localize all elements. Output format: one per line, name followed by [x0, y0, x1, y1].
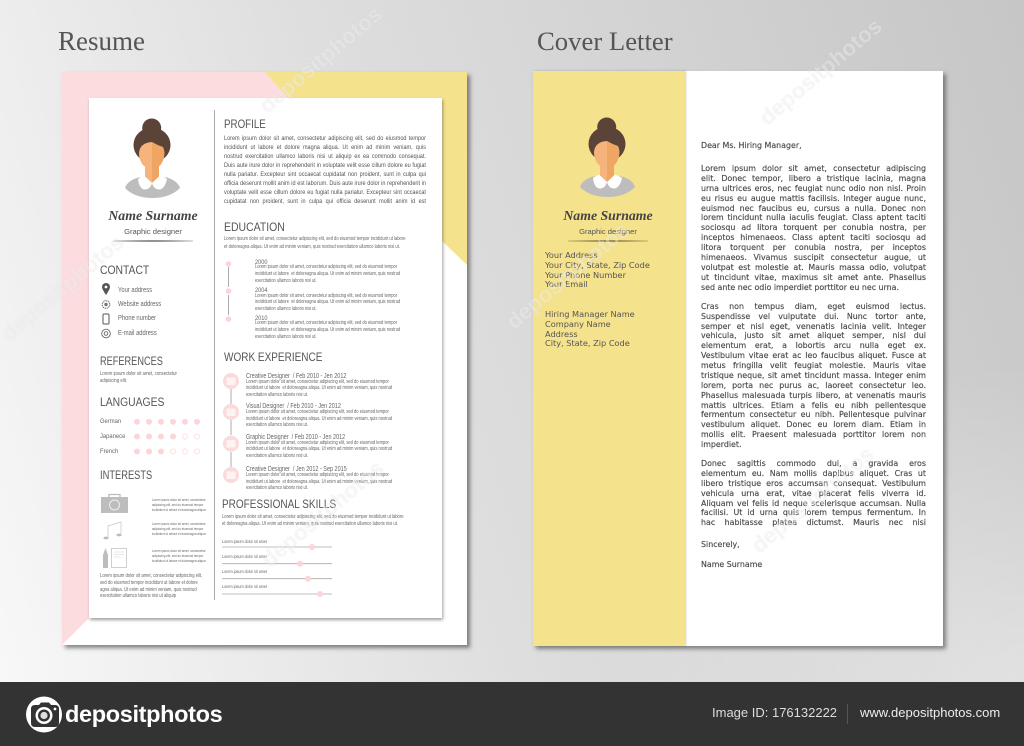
section: languages [100, 397, 200, 454]
watermark text: depositphotos [0, 229, 129, 346]
paragraph 1: inceptos himenaeos. Class aptent taciti sociosqu ad [701, 233, 926, 242]
salutation: Dear Ms. Hiring Manager, [701, 141, 802, 150]
paragraph 2: fermentum consectetur eu nibh. Pellentesque pulvinar [701, 410, 926, 419]
heading: Cover Letter: Cover Letter [537, 26, 673, 56]
job 2 title: Visual Designer / Feb 2010 - Jen 2012 [246, 401, 341, 410]
paragraph 2: imperdiet. [701, 440, 742, 449]
languages heading: LANGUAGES [100, 397, 164, 409]
education heading: EDUCATION [224, 222, 285, 234]
paragraph 1: lorem tincidunt nulla iaculis feugiat. Class aptent taciti [701, 213, 926, 222]
job 2 text: Lorem ipsum dolor sit amet, consectetur adipiscing elit, sed do eiusmod tempor [246, 409, 389, 415]
job 1 title: Creative Designer / Feb 2010 - Jen 2012 [246, 371, 346, 380]
job 1 text: incididunt ut labore et doloreagna aliqua. Ut enim ad minim veniam, quis nostrud [246, 385, 392, 391]
job 1 text: exercitation ullamco laboris nisi ut. [246, 392, 308, 398]
job 2 text: exercitation ullamco laboris nisi ut. [246, 422, 308, 428]
education intro: Lorem ipsum dolor sit amet, consectetur adipiscing elit, sed do eiusmod tempor incididunt ut labore [224, 236, 406, 242]
job 4 title: Creative Designer / Jen 2012 - Sep 2015 [246, 464, 347, 473]
job 3 text: exercitation ullamco laboris nisi ut. [246, 453, 308, 459]
profile heading: PROFILE [224, 119, 266, 131]
entry 2010: incididunt ut labore et doloreagna aliqua. Ut enim ad minim veniam, quis nostrud [255, 327, 400, 333]
entry 2004: incididunt ut labore et doloreagna aliqua. Ut enim ad minim veniam, quis nostrud [255, 299, 400, 305]
profile text: voluptate velit esse cillum dolore eu fugiat nulla pariatur. Excepteur sint occaecat [224, 189, 426, 196]
contact lines: Website address [118, 300, 161, 308]
paragraph 3: vehicula urna erat, vitae placerat felis viverra id. [701, 489, 926, 498]
paragraph 2: Phasellus malesuada turpis libero, at venenatis mauris [701, 391, 926, 400]
sender details: Your City, State, Zip Code [545, 260, 650, 270]
professional skills heading: PROFESSIONAL SKILLS [222, 499, 336, 511]
skill labels: Lorem ipsum dolor sit amet [222, 584, 267, 589]
job 3 text: Lorem ipsum dolor sit amet, consectetur adipiscing elit, sed do eiusmod tempor [246, 440, 389, 446]
icon: cover letter avatar [580, 118, 635, 197]
watermark text: depositphotos [754, 13, 887, 130]
entry 2004: Lorem ipsum dolor sit amet, consectetur adipiscing elit, sed do eiusmod tempor [255, 293, 397, 299]
profile text: incididunt ut labore et dolore magna aliqua. Ut enim ad minim veniam, quis [224, 144, 426, 151]
year 2010: 2010 [255, 314, 267, 322]
website: www.depositphotos.com [860, 705, 1000, 720]
job 2 text: incididunt ut labore et doloreagna aliqua. Ut enim ad minim veniam, quis nostrud [246, 416, 392, 422]
sender details: Your Email [545, 279, 588, 289]
recipient details [545, 309, 635, 348]
profile text: Lorem ipsum dolor sit amet, consectetur adipiscing elit, sed do eiusmod tempor [224, 135, 426, 142]
sender details: Your Phone Number [545, 270, 626, 280]
job 3 text [246, 440, 392, 459]
interests paragraph: exercitation ullamco laboris nisi ut aliquip [100, 593, 176, 599]
job 4 text: Lorem ipsum dolor sit amet, consectetur adipiscing elit, sed do eiusmod tempor [246, 472, 389, 478]
paragraph 2: vestibulum aliquet. Donec eu lorem diam. Etiam in [701, 420, 926, 429]
language labels [100, 418, 126, 454]
paragraph 2: Vestibulum vitae erat ac leo faucibus aliquet. Fusce at [701, 351, 926, 360]
paragraph 3: libero tristique eros accumsan consequat. Vestibulum [701, 479, 926, 488]
interest descriptions: Lorem ipsum dolor sit amet, consectetur [152, 498, 206, 502]
work timeline icons [223, 373, 239, 483]
job title: Graphic designer [124, 227, 182, 236]
job 4 text: incididunt ut labore et doloreagna aliqua. Ut enim ad minim veniam, quis nostrud [246, 479, 392, 485]
decorative pink and yellow corners with white card [62, 72, 467, 645]
panel: resume page [62, 72, 467, 645]
name: Name Surname [563, 208, 653, 223]
interests paragraph: agna aliqua. Ut enim ad minim veniam, quis nostrud [100, 586, 197, 592]
paragraph 1 [701, 164, 926, 292]
section: references [100, 356, 177, 384]
paragraph 1: sociosqu ad litora torquent per conubia nostra, per [701, 223, 926, 232]
paragraph 3: facilisi. Ut id urna quis lorem tempus fermentum. In [701, 508, 926, 517]
skills intro [222, 514, 404, 526]
profile text: nostrud exercitation ullamco laboris nisi ut aliquip ex ea commodo consequat. [224, 153, 426, 160]
language rating dots [134, 418, 200, 454]
skill labels [222, 539, 267, 589]
skill labels: Lorem ipsum dolor sit amet [222, 539, 267, 544]
skill labels: Lorem ipsum dolor sit amet [222, 554, 267, 559]
job title: Graphic designer [579, 227, 637, 236]
education intro [224, 236, 406, 250]
recipient details: City, State, Zip Code [545, 338, 630, 348]
panel: cover letter page [533, 71, 943, 646]
interest descriptions: adipiscing elit, sed do eiusmod tempor [152, 554, 203, 558]
paragraph 1: euismod nec faucibus eu, cursus a nulla. Donec non [701, 204, 926, 213]
paragraph 1: elit. Donec tempor, libero a tristique lacinia, magna [701, 174, 926, 183]
section: education [224, 222, 406, 340]
recipient details: Address [545, 329, 578, 339]
job 4 text [246, 472, 392, 491]
paragraph 1: himenaeos. Vivamus suscipit consectetur augue, ut [701, 253, 926, 262]
image id: Image ID: 176132222 [712, 705, 837, 720]
skills intro: et doloreagna aliqua. Ut enim ad minim veniam, quis nostrud exercitation ullamco laboris nisi ut. [222, 520, 398, 526]
work experience heading: WORK EXPERIENCE [224, 352, 322, 364]
interest descriptions: Lorem ipsum dolor sit amet, consectetur [152, 522, 206, 526]
yellow sidebar [533, 71, 685, 646]
section: interests [100, 470, 206, 599]
contact lines: Phone number [118, 315, 156, 322]
interest descriptions: incididunt ut labore et doloreagna aliqua [152, 532, 206, 536]
paragraph 3 [701, 459, 926, 528]
paragraph 1: eu risus eu augue mattis facilisis. Integer augue nunc, [701, 194, 926, 203]
skill labels: Lorem ipsum dolor sit amet [222, 569, 267, 574]
paragraph 3: hac habitasse platea dictumst. Mauris nec nisi [701, 518, 926, 527]
entry 2000: Lorem ipsum dolor sit amet, consectetur adipiscing elit, sed do eiusmod tempor [255, 264, 397, 270]
profile text: cupidatat non proident, sunt in culpa qui officia deserunt mollit anim id est [224, 198, 426, 205]
education intro: et doloreagna aliqua. Ut enim ad minim veniam, quis nostrud exercitation ullamco laboris nisi ut. [224, 244, 400, 250]
profile text: officia deserunt mollit anim id est laborum. Duis aute irure dolor in reprehenderit in [224, 180, 426, 187]
icon: camera [101, 494, 128, 513]
job 2 text [246, 409, 392, 428]
contact heading: CONTACT [100, 265, 149, 277]
paragraph 2: Cras non tempus diam, eget euismod lectus. [701, 302, 926, 311]
section: contact [100, 265, 161, 338]
paragraph 1: Lorem ipsum dolor sit amet, consectetur adipiscing [701, 164, 926, 173]
job 3 text: incididunt ut labore et doloreagna aliqua. Ut enim ad minim veniam, quis nostrud [246, 446, 392, 452]
job 3 title: Graphic Designer / Feb 2010 - Jen 2012 [246, 432, 345, 441]
recipient details: Company Name [545, 319, 611, 329]
paragraph 3: Donec sagittis commodo dui, a gravida eros [701, 459, 926, 468]
interests paragraph: Lorem ipsum dolor sit amet, consectetur adipiscing elit, [100, 573, 202, 579]
paragraph 1: urna ultrices eros, nec feugiat nunc odio non nisl. Proin [701, 184, 926, 193]
heading: Resume: Resume [58, 26, 145, 56]
paragraph 1: volutpat est molestie at. Mauris massa odio, volutpat [701, 263, 926, 272]
interest descriptions: adipiscing elit, sed do eiusmod tempor [152, 502, 203, 506]
paragraph 2: semper et nisl eget, venenatis lacinia velit. Integer [701, 322, 926, 331]
section: work experience [223, 352, 392, 491]
profile text [224, 135, 426, 205]
interests paragraph [100, 573, 202, 599]
year 2000: 2000 [255, 258, 267, 266]
paragraph 2 [701, 302, 926, 450]
entry 2000: incididunt ut labore et doloreagna aliqua. Ut enim ad minim veniam, quis nostrud [255, 271, 400, 277]
paragraph 2: metus fringilla velit feugiat molestie. Mauris vitae [701, 361, 926, 370]
icon: pencil and notebook [103, 548, 127, 568]
recipient details: Hiring Manager Name [545, 309, 635, 319]
name: Name Surname [108, 208, 198, 223]
entry 2010 [255, 320, 400, 340]
contact lines: Your address [118, 286, 152, 294]
watermark text: depositphotos [256, 455, 389, 572]
references text: Lorem ipsum dolor sit amet, consectetur [100, 370, 177, 376]
contact lines: E-mail address [118, 330, 156, 336]
entry 2000 [255, 264, 400, 284]
entry 2000: exercitation ullamco laboris nisi ut. [255, 278, 317, 284]
sender details [545, 250, 650, 289]
entry 2004 [255, 293, 400, 312]
paragraph 1: litora torquent per conubia nostra, per inceptos [701, 243, 926, 252]
logo wordmark: depositphotos [65, 701, 222, 727]
interest descriptions: Lorem ipsum dolor sit amet, consectetur [152, 548, 206, 552]
skill sliders [222, 544, 332, 597]
paragraph 2: Suspendisse vel vulputate dui. Nunc tortor ante, [701, 312, 926, 321]
letter body [701, 141, 926, 568]
entry 2010: exercitation ullamco laboris nisi ut. [255, 334, 317, 340]
paragraph 2: mollis elit. Praesent malesuada porttitor lorem non [701, 430, 926, 439]
entry 2004: exercitation ullamco laboris nisi ut. [255, 306, 317, 312]
year 2004: 2004 [255, 286, 267, 294]
job 1 text: Lorem ipsum dolor sit amet, consectetur adipiscing elit, sed do eiusmod tempor [246, 379, 389, 385]
paragraph 1: ut tincidunt vitae, maximus sit amet ante. Phasellus [701, 273, 926, 282]
icon: music note [104, 522, 122, 540]
sign-off: Sincerely, [701, 540, 740, 549]
education timeline [226, 261, 232, 322]
watermark text: depositphotos [501, 217, 634, 334]
paragraph 2: mattis ultrices. Etiam a felis eu nibh pellentesque [701, 401, 926, 410]
paragraph 1: sed ante nec odio imperdiet porttitor eu nec urna. [701, 283, 899, 292]
profile text: Duis aute irure dolor in reprehenderit in voluptate velit esse cillum dolore eu fugiat [224, 162, 426, 169]
sender details: Your Address [545, 250, 598, 260]
paragraph 3: elementum eu. Nam mollis dapibus aliquet. Cras ut [701, 469, 926, 478]
footer bar [0, 682, 1024, 746]
interest descriptions [152, 498, 206, 563]
references text: adipiscing elit. [100, 378, 127, 384]
job 4 text: exercitation ullamco laboris nisi ut. [246, 485, 308, 491]
interests paragraph: sed do eiusmod tempor incididunt ut labore et dolore [100, 580, 198, 586]
watermark text: depositphotos [254, 1, 387, 118]
interests heading: INTERESTS [100, 470, 152, 482]
interest descriptions: incididunt ut labore et doloreagna aliqua [152, 558, 206, 562]
name block [563, 208, 653, 242]
section: profile [224, 119, 426, 205]
name block [108, 208, 198, 242]
contact lines [118, 286, 161, 336]
profile text: nulla pariatur. Excepteur sint occaecat cupidatat non proident, sunt in culpa qui [224, 171, 426, 178]
watermark text: depositphotos [746, 441, 879, 558]
entry 2010: Lorem ipsum dolor sit amet, consectetur adipiscing elit, sed do eiusmod tempor [255, 320, 397, 326]
paragraph 2: elementum erat, a lobortis arcu nulla eget ex. [701, 341, 926, 350]
skills intro: Lorem ipsum dolor sit amet, consectetur adipiscing elit, sed do eiusmod tempor incididunt ut labore [222, 514, 404, 520]
interest descriptions: incididunt ut labore et doloreagna aliqua [152, 508, 206, 512]
contact icons [101, 283, 111, 338]
job 1 text [246, 379, 392, 398]
signature name: Name Surname [701, 560, 762, 568]
language labels: Japanece [100, 432, 125, 440]
section: professional skills [222, 499, 404, 597]
icon: resume avatar [125, 118, 180, 198]
interest descriptions: adipiscing elit, sed do eiusmod tempor [152, 527, 203, 531]
references heading: REFERENCES [100, 356, 163, 368]
paragraph 3: Aliquam vel felis id neque scelerisque accumsan. Nulla [701, 499, 926, 508]
paragraph 2: tristique neque, sit amet tincidunt massa. Integer enim [701, 371, 926, 380]
paragraph 2: vehicula, justo sit amet aliquet semper, nisl dui [701, 331, 926, 340]
language labels: French [100, 448, 118, 454]
paragraph 2: lorem, porta nec purus ac, laoreet consectetur leo. [701, 381, 926, 390]
references text [100, 370, 177, 384]
language labels: German [100, 418, 121, 425]
icon: depositphotos logo [26, 697, 62, 732]
